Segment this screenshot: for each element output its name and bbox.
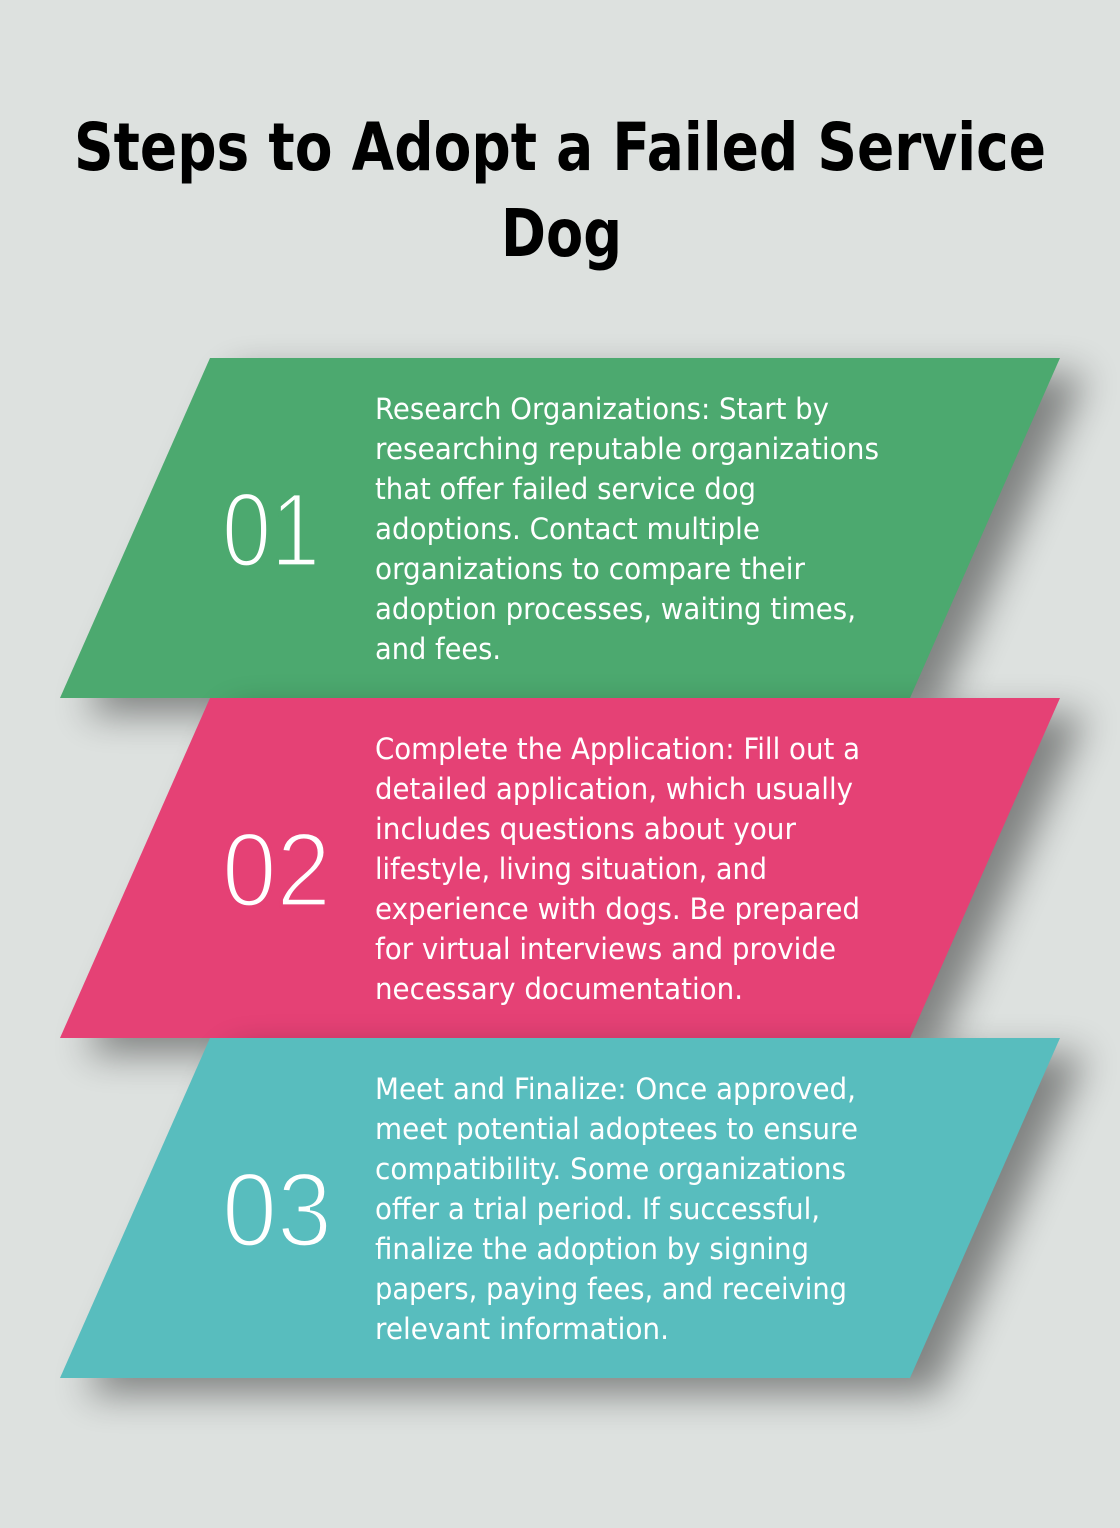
step 1 text [375,392,879,666]
step 1 text: and fees. [375,632,501,666]
step 2 text [375,732,860,1006]
step 2 text: for virtual interviews and provide [375,932,836,966]
title [74,109,1046,272]
panel: step 2 complete the application [60,698,1086,1054]
title: Dog [501,195,622,272]
step 1 text: adoptions. Contact multiple [375,512,760,546]
step 2 text: lifestyle, living situation, and [375,852,767,886]
step 2 text: detailed application, which usually [375,772,853,806]
step 1 text: Research Organizations: Start by [375,392,829,426]
step 2 text: Complete the Application: Fill out a [375,732,860,766]
step number 01: 01 [222,472,320,589]
step 3 text: papers, paying fees, and receiving [375,1272,847,1306]
step 1 text: that offer failed service dog [375,472,756,506]
step 3 text: relevant information. [375,1312,669,1346]
step 2 text: includes questions about your [375,812,797,846]
step 2 text: experience with dogs. Be prepared [375,892,860,926]
step 3 text: compatibility. Some organizations [375,1152,846,1186]
step 1 text: researching reputable organizations [375,432,879,466]
step 3 text: offer a trial period. If successful, [375,1192,820,1226]
panel: step 1 research organizations [60,358,1086,714]
step 1 text: organizations to compare their [375,552,806,586]
step number 03: 03 [222,1152,332,1269]
step 2 text: necessary documentation. [375,972,743,1006]
step number 02: 02 [222,812,331,929]
step 1 text: adoption processes, waiting times, [375,592,856,626]
panel: step 3 meet and finalize [60,1038,1086,1394]
step 3 text: meet potential adoptees to ensure [375,1112,858,1146]
step 3 text: Meet and Finalize: Once approved, [375,1072,856,1106]
step 3 text [375,1072,858,1346]
step 3 text: finalize the adoption by signing [375,1232,809,1266]
